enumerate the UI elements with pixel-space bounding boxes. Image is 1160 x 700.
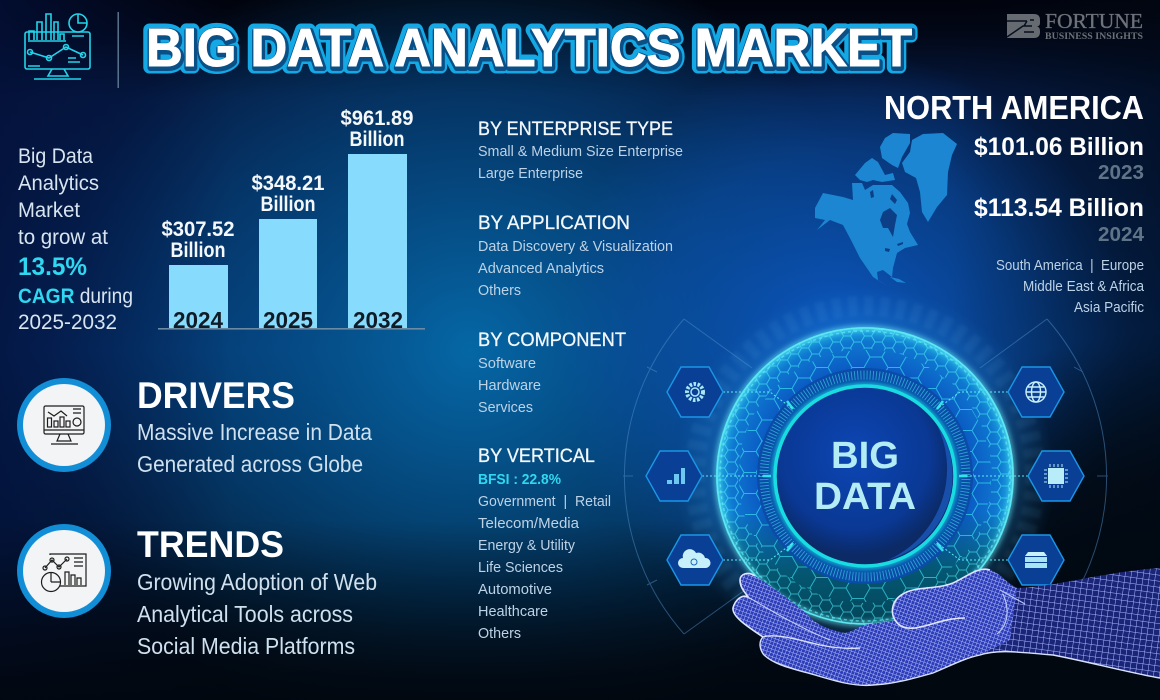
panel: by enterprise type: Large Enterprise (478, 165, 583, 182)
bar chart: market size: 2024 (173, 307, 223, 333)
panel: north america stats: $101.06 Billion (974, 133, 1144, 161)
panel: north america stats: 2023 (1098, 162, 1144, 184)
panel: by enterprise type (478, 118, 683, 182)
panel: by application: Data Discovery & Visualization (478, 238, 673, 255)
bar chart: market size: Billion (170, 239, 226, 262)
logo: Fortune Business Insights (1007, 9, 1143, 41)
text: big data: BIG (831, 435, 899, 477)
icon: trends badge (17, 524, 111, 618)
panel: by component: Hardware (478, 377, 541, 394)
icon: analytics monitor (25, 14, 90, 79)
title: BIG DATA ANALYTICS MARKET (146, 18, 912, 78)
panel: trends (17, 524, 377, 659)
text block: market growth summary: 13.5% (18, 253, 87, 281)
text block: market growth summary: to grow at (18, 226, 108, 249)
heading: trends: TRENDS (137, 524, 284, 565)
map: North America (815, 133, 957, 290)
panel: north america stats (884, 89, 1145, 316)
text block: market growth summary: CAGR during (18, 285, 133, 308)
text: trends description (137, 569, 377, 659)
panel: by vertical: Automotive (478, 581, 552, 598)
title: BIG DATA ANALYTICS MARKET (147, 20, 913, 80)
panel: by vertical: Life Sciences (478, 559, 563, 576)
panel: by component: Services (478, 399, 533, 416)
panel: by vertical (478, 445, 611, 642)
connector lines (702, 392, 1028, 560)
text: big data (814, 435, 916, 518)
panel: north america stats: Middle East & Africa (1023, 278, 1145, 295)
text block: market growth summary: 2025-2032 (18, 311, 117, 334)
panel: by component: Software (478, 355, 536, 372)
text block: market growth summary (18, 145, 133, 334)
panel: by vertical: Healthcare (478, 603, 548, 620)
panel: by vertical: Government | Retail (478, 493, 611, 510)
bar chart: market size: $348.21 (252, 172, 325, 195)
panel: by enterprise type: BY ENTERPRISE TYPE (478, 118, 673, 140)
sphere: big data globe (675, 286, 1055, 666)
panel: by application (478, 212, 673, 299)
text block: market growth summary: Big Data (18, 145, 93, 168)
panel: by vertical: Others (478, 625, 521, 642)
text: drivers description: Massive Increase in Data (137, 419, 372, 445)
icon: gear hexagon (667, 367, 723, 417)
panel: by component: BY COMPONENT (478, 329, 626, 351)
panel: by vertical: BFSI : 22.8% (478, 472, 561, 488)
panel: by component (478, 329, 626, 416)
icon: server hexagon (1008, 535, 1064, 585)
text: big data: DATA (814, 476, 916, 518)
logo: Fortune Business Insights: FORTUNE (1045, 9, 1143, 33)
panel: by enterprise type: Small & Medium Size Enterprise (478, 143, 683, 160)
panel: north america stats: Asia Pacific (1074, 299, 1144, 316)
title: BIG DATA ANALYTICS MARKET (146, 19, 912, 79)
bar chart: market size: 2032 (353, 307, 403, 333)
bar chart: market size: $307.52 (162, 218, 234, 241)
header divider (118, 12, 119, 88)
logo: Fortune Business Insights: BUSINESS INSIGHTS (1045, 31, 1143, 41)
bar chart: market size: Billion (350, 128, 404, 151)
panel: north america stats: NORTH AMERICA (884, 89, 1144, 126)
icon: drivers badge (17, 378, 111, 472)
text: drivers description (137, 419, 372, 477)
text: trends description: Analytical Tools across (137, 601, 353, 627)
text: drivers description: Generated across Globe (137, 451, 363, 477)
panel: north america stats: $113.54 Billion (974, 194, 1144, 222)
panel: by vertical: Energy & Utility (478, 537, 575, 554)
text: trends description: Social Media Platforms (137, 633, 355, 659)
icon: globe hexagon (1008, 367, 1064, 417)
illustration: wireframe hand (733, 568, 1160, 685)
heading: drivers: DRIVERS (137, 375, 295, 416)
panel: by application: BY APPLICATION (478, 212, 630, 234)
icon: cloud hexagon (667, 535, 723, 585)
icon: chip hexagon (1028, 451, 1084, 501)
panel: by vertical: Telecom/Media (478, 515, 580, 532)
text block: market growth summary: Analytics (18, 172, 99, 195)
panel: north america stats: 2024 (1098, 224, 1145, 246)
bar chart: market size: 2025 (263, 307, 313, 333)
text: trends description: Growing Adoption of Web (137, 569, 377, 595)
panel: by vertical: BY VERTICAL (478, 445, 595, 467)
panel: drivers (17, 375, 372, 477)
panel: by application: Advanced Analytics (478, 260, 604, 277)
text block: market growth summary: Market (18, 199, 80, 222)
bar chart: market size: $961.89 (340, 107, 414, 130)
panel: north america stats: South America | Europe (996, 257, 1144, 274)
outer arcs (623, 319, 1108, 634)
bar chart: market size (158, 107, 425, 333)
panel: by application: Others (478, 282, 521, 299)
icon: bar chart hexagon (646, 451, 702, 501)
bar chart: market size: Billion (260, 193, 316, 216)
